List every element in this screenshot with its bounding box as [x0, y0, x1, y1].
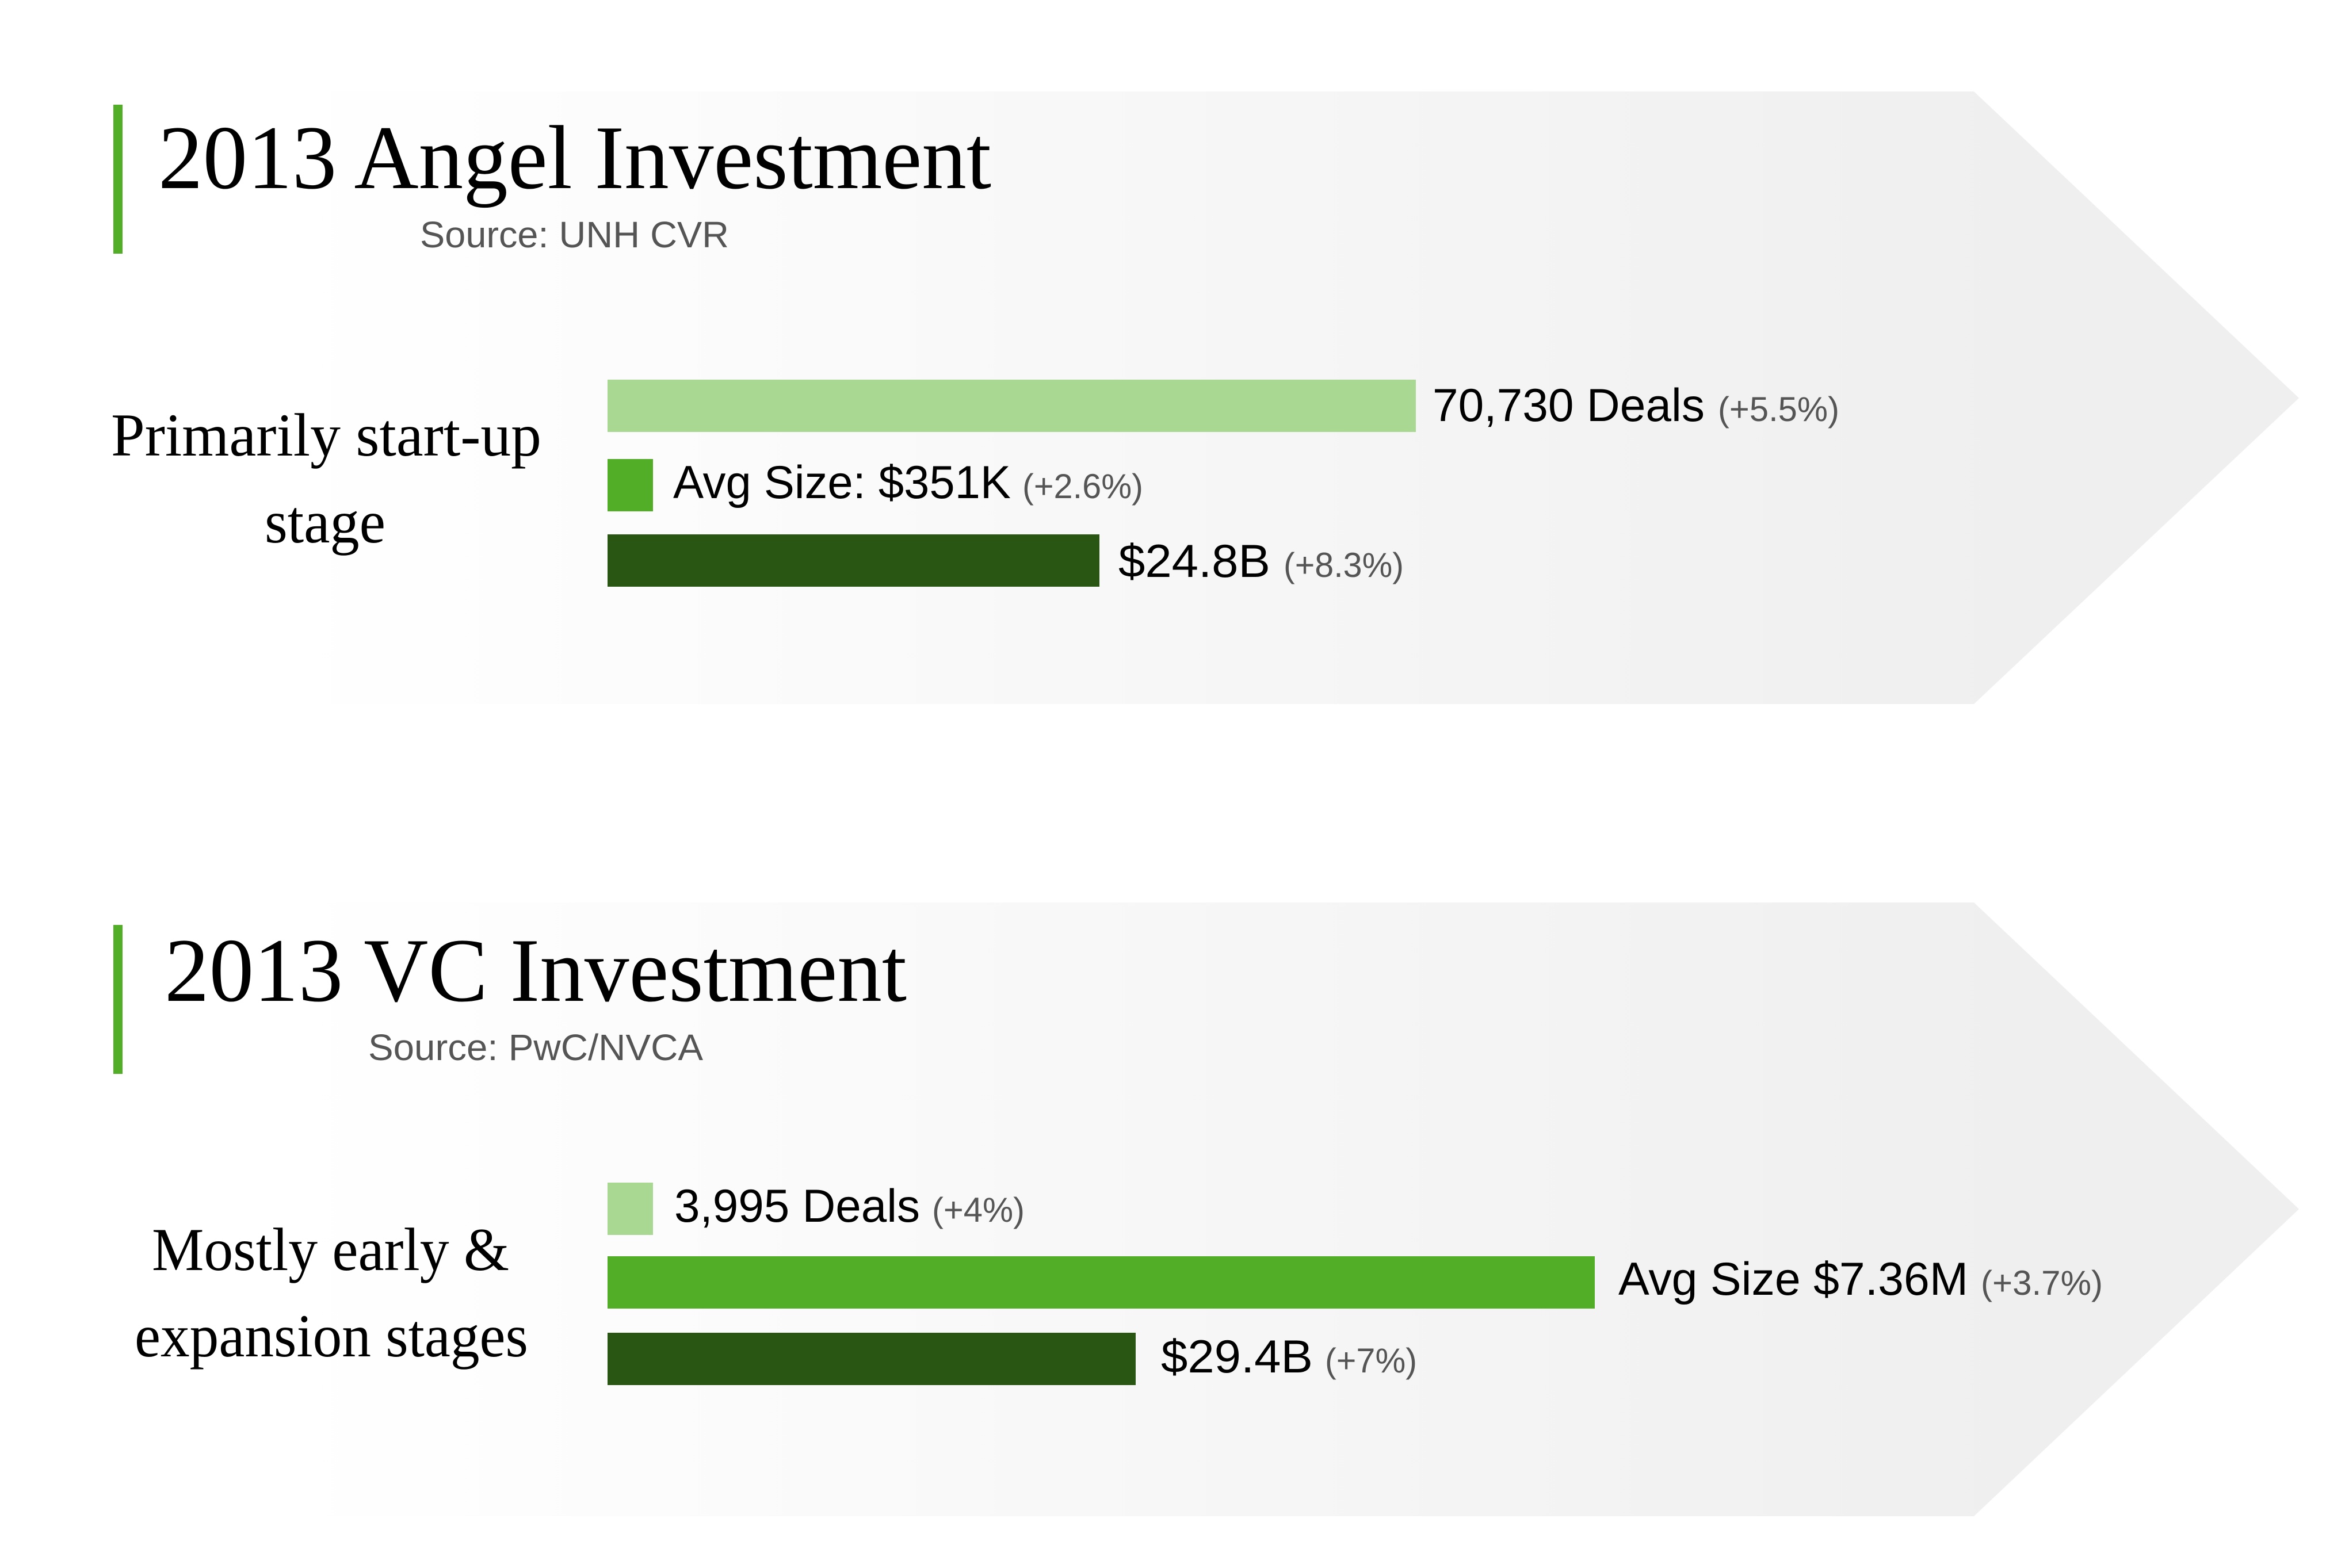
heading: 2013 Angel Investment: 2013 Angel Investment [158, 108, 991, 208]
text: mostly early and expansion stages: expansion stages [135, 1302, 528, 1370]
source: UNH CVR: Source: UNH CVR [420, 214, 729, 255]
label: vc deals: 3,995 Deals [674, 1180, 920, 1232]
label: angel deals: (+5.5%) [1718, 390, 1839, 429]
label: vc total: (+7%) [1325, 1341, 1417, 1380]
label: angel average size: Avg Size: $351K [673, 457, 1011, 508]
arrow background: vc [288, 902, 2299, 1516]
text: primarily start-up stage [111, 401, 541, 556]
label: angel total [1118, 536, 1404, 587]
bar: angel average size [608, 459, 653, 511]
arrow background: angel [288, 91, 2299, 704]
text: primarily start-up stage: Primarily start-up [111, 401, 541, 469]
label: vc total: $29.4B [1161, 1331, 1313, 1383]
bar: angel deals [608, 380, 1416, 432]
label: vc average size: Avg Size $7.36M [1618, 1253, 1968, 1305]
bar: angel total [608, 534, 1099, 587]
label: angel deals: 70,730 Deals [1433, 380, 1705, 431]
bar: vc total [608, 1333, 1136, 1385]
label: angel average size: (+2.6%) [1022, 467, 1143, 506]
bar: vc deals [608, 1183, 653, 1235]
bar: vc average size [608, 1256, 1595, 1309]
label: angel total: $24.8B [1118, 536, 1270, 587]
panel: angel investment [111, 91, 2299, 704]
text: mostly early and expansion stages [135, 1216, 528, 1370]
label: angel deals [1433, 380, 1839, 431]
label: vc total [1161, 1331, 1417, 1383]
panel: vc investment [113, 902, 2299, 1516]
label: angel total: (+8.3%) [1284, 546, 1404, 584]
label: vc average size: (+3.7%) [1981, 1264, 2103, 1302]
text: mostly early and expansion stages: Mostly early & [152, 1216, 509, 1283]
label: vc deals: (+4%) [932, 1191, 1025, 1229]
heading: 2013 VC Investment: 2013 VC Investment [165, 920, 907, 1021]
source: PwC/NVCA: Source: PwC/NVCA [368, 1027, 703, 1068]
text: primarily start-up stage: stage [265, 488, 385, 556]
accent bar: angel heading [113, 105, 123, 254]
accent bar: vc heading [113, 925, 123, 1074]
